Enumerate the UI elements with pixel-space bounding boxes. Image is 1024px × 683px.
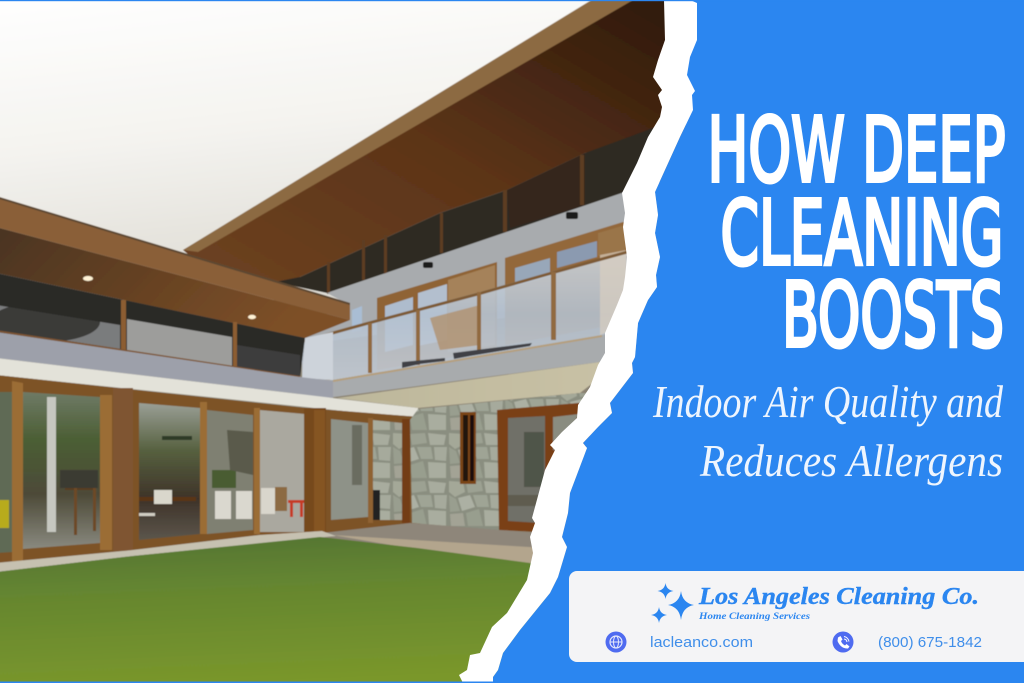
photo backing	[0, 0, 680, 683]
lower grey wall	[0, 332, 333, 398]
torn white paper edge	[459, 0, 697, 683]
frame right	[254, 408, 260, 534]
patio door	[497, 402, 590, 532]
house photograph	[0, 0, 686, 683]
tagline: Home Cleaning Services	[698, 612, 810, 622]
top edge line	[0, 0, 1024, 1]
far left glass	[0, 392, 12, 553]
wooden frame band	[0, 375, 420, 563]
icon: globe	[606, 632, 626, 652]
icon: phone	[832, 632, 854, 652]
column one	[113, 388, 133, 551]
title	[708, 98, 1006, 367]
company name: Los Angeles Cleaning Co.	[698, 584, 979, 610]
left stile	[12, 381, 23, 563]
upper left windows	[0, 273, 333, 380]
opening with stone	[373, 420, 402, 520]
lawn	[0, 537, 545, 683]
wall lamps	[423, 212, 578, 268]
slit window	[460, 412, 476, 484]
column two	[304, 408, 326, 533]
ground floor sliding doors	[0, 375, 420, 563]
upper balcony doors	[352, 222, 640, 370]
concrete curb	[0, 531, 336, 572]
lower roof overhang	[0, 196, 350, 338]
glass B	[23, 392, 100, 549]
logo sparkles	[651, 583, 694, 623]
contact panel	[569, 571, 1024, 662]
mullion	[200, 402, 207, 534]
balcony glass railing	[302, 247, 640, 380]
white ledge	[0, 358, 418, 417]
phone number: (800) 675-1842	[878, 634, 982, 651]
upper roof	[183, 0, 686, 292]
sky	[0, 0, 686, 300]
patio	[322, 523, 545, 566]
blue background panel	[493, 0, 1024, 683]
upper clerestory windows	[275, 120, 686, 294]
glass C	[139, 403, 200, 540]
glass D	[207, 410, 253, 534]
stone wall	[410, 393, 600, 532]
upper grey wall	[300, 175, 686, 345]
panel background	[569, 571, 1024, 662]
script subtitle	[652, 376, 1004, 486]
open interior	[260, 410, 305, 532]
door glass	[331, 419, 368, 520]
website: lacleanco.com	[650, 634, 753, 651]
bottom edge line	[0, 682, 1024, 683]
balcony slab	[300, 328, 640, 408]
